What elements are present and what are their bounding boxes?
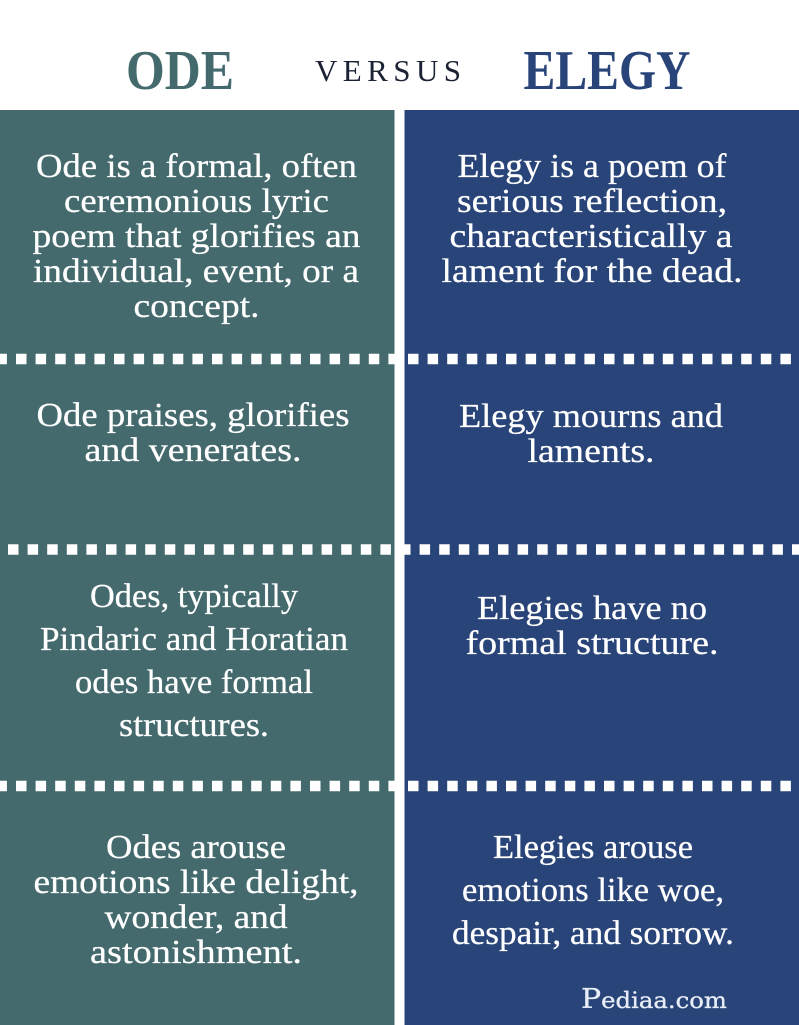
title: VERSUS: VERSUS — [315, 53, 461, 88]
text: ode structure: odes have formal — [75, 664, 313, 701]
text: ode structure: structures. — [119, 707, 269, 744]
text: ode praises: and venerates. — [84, 432, 302, 469]
text: elegy definition — [442, 148, 742, 290]
divider row 2 — [0, 544, 799, 555]
text: elegy emotions: Elegies arouse — [493, 829, 693, 866]
text: ode definition — [32, 148, 360, 325]
text: ode structure: Pindaric and Horatian — [40, 621, 348, 658]
text: elegy structure — [466, 590, 718, 662]
divider row 1 — [0, 354, 799, 364]
text: ode definition: concept. — [134, 288, 260, 325]
text: elegy mourns: Elegy mourns and — [459, 398, 723, 435]
text: elegy emotions: emotions like woe, — [462, 872, 724, 909]
text: elegy structure: formal structure. — [466, 625, 718, 662]
text: elegy emotions: despair, and sorrow. — [452, 915, 734, 952]
text: elegy definition: Elegy is a poem of — [458, 148, 727, 185]
text: ode structure — [40, 578, 348, 744]
text: elegy definition: serious reflection, — [457, 183, 727, 220]
text: ode emotions: Odes arouse — [106, 829, 286, 866]
text: ode definition: ceremonious lyric — [64, 183, 329, 220]
text: elegy mourns — [459, 398, 723, 470]
panel: elegy column background — [404, 110, 799, 1025]
text: ode structure: Odes, typically — [90, 578, 298, 615]
text: ode emotions — [34, 829, 358, 971]
divider row 3 — [0, 781, 799, 791]
text: elegy definition: lament for the dead. — [442, 253, 742, 290]
text: elegy mourns: laments. — [528, 433, 654, 470]
text: ode emotions: emotions like delight, — [34, 864, 358, 901]
text: ode praises: Ode praises, glorifies — [36, 397, 350, 434]
title: ODE: ODE — [126, 40, 234, 102]
text: elegy structure: Elegies have no — [477, 590, 707, 627]
text: ode emotions: wonder, and — [104, 899, 288, 936]
text: elegy definition: characteristically a — [450, 218, 732, 255]
text: ode definition: individual, event, or a — [33, 253, 359, 290]
text: ode praises — [36, 397, 350, 469]
text: ode definition: Ode is a formal, often — [36, 148, 357, 185]
logo: Pediaa.com: Pediaa.com — [581, 984, 727, 1015]
panel: ode column background — [0, 110, 394, 1025]
text: elegy emotions — [452, 829, 734, 952]
title: ELEGY: ELEGY — [524, 40, 690, 102]
text: ode definition: poem that glorifies an — [32, 218, 360, 255]
text: ode emotions: astonishment. — [90, 934, 302, 971]
